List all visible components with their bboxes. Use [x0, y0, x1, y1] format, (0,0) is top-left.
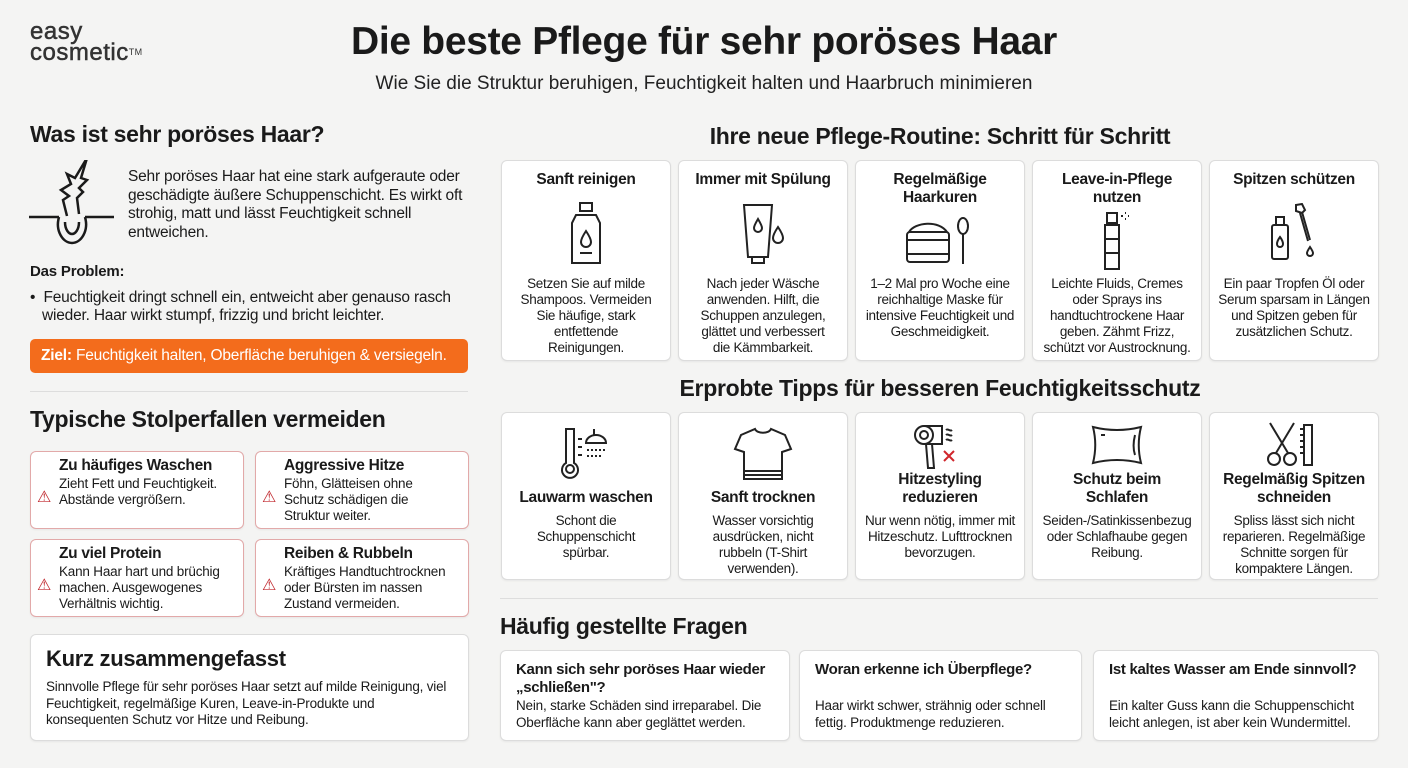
pitfall: waschen — [30, 451, 244, 529]
step 4: Leave-in-Pflege — [1062, 171, 1172, 188]
pitfall: waschen: ⚠ — [37, 489, 51, 506]
pitfall: protein: Zu viel Protein — [59, 545, 161, 562]
step 5: Spitzen schützen — [1233, 171, 1355, 188]
tip 4: Seiden-/Satinkissenbezug oder Schlafhaube gegen Reibung. — [1043, 513, 1191, 560]
step 4: nutzen — [1093, 189, 1141, 206]
pitfall: hitze: ⚠ — [262, 489, 276, 506]
heading: was ist: Was ist sehr poröses Haar? — [30, 121, 324, 147]
summary card — [30, 634, 469, 741]
faq 1: Nein, starke Schäden sind irreparabel. Die Oberfläche kann aber geglättet werden. — [516, 698, 761, 730]
pitfall: protein — [30, 539, 244, 617]
tip 1 — [501, 412, 671, 580]
text: problem: • Feuchtigkeit dringt schnell ein, entweicht aber genauso rasch wieder. Haar wirkt stumpf, frizzig und bricht leichter. — [30, 289, 451, 324]
text: problem — [30, 263, 451, 324]
step 3: Haarkuren — [903, 189, 977, 206]
tip 3: Nur wenn nötig, immer mit Hitzeschutz. Lufttrocknen bevorzugen. — [865, 513, 1015, 560]
step 3: 1–2 Mal pro Woche eine reichhaltige Maske für intensive Feuchtigkeit und Geschmeidigkeit. — [866, 276, 1014, 339]
tip 3: Hitzestyling — [898, 471, 982, 488]
step 1: Sanft reinigen — [536, 171, 636, 188]
tip 3: reduzieren — [902, 489, 978, 506]
pitfall: protein: ⚠ — [37, 577, 51, 594]
tip 2: Sanft trocknen — [711, 489, 815, 506]
subtitle: Wie Sie die Struktur beruhigen, Feuchtigkeit halten und Haarbruch minimieren — [376, 73, 1032, 94]
tip 4: Schutz beim — [1073, 471, 1161, 488]
summary card: Sinnvolle Pflege für sehr poröses Haar setzt auf milde Reinigung, viel Feuchtigkeit, regelmäßige Kuren, Leave-in-Produkte und konsequenten Schutz vor Hitze und Reibung. — [46, 679, 446, 727]
title: Die beste Pflege für sehr poröses Haar — [351, 20, 1057, 63]
tip 5: Regelmäßig Spitzen — [1223, 471, 1365, 488]
pitfall: hitze: Aggressive Hitze — [284, 457, 404, 474]
tip 5: Spliss lässt sich nicht reparieren. Regelmäßige Schnitte sorgen für kompaktere Längen. — [1223, 513, 1365, 576]
step 1 — [501, 160, 671, 361]
pitfall: protein: Kann Haar hart und brüchig machen. Ausgewogenes Verhältnis wichtig. — [59, 564, 220, 611]
step 3: Regelmäßige — [893, 171, 987, 188]
pitfall: waschen: Abstände vergrößern. — [59, 492, 186, 507]
pitfall: waschen: Zieht Fett und Feuchtigkeit. — [59, 476, 217, 491]
step 3 — [855, 160, 1025, 361]
tip 4 — [1032, 412, 1202, 580]
tip 1: Lauwarm waschen — [519, 489, 653, 506]
text: problem: Das Problem: — [30, 263, 124, 280]
step 5 — [1209, 160, 1379, 361]
faq 1: Kann sich sehr poröses Haar wieder „schließen"? — [516, 661, 765, 696]
text: definition: Sehr poröses Haar hat eine stark aufgeraute oder geschädigte äußere Schuppenschicht. Es wirkt oft strohig, matt und lässt Feuchtigkeit schnell entweichen. — [128, 168, 462, 240]
pitfall: hitze — [255, 451, 469, 529]
callout: ziel — [30, 339, 468, 373]
tip 2 — [678, 412, 848, 580]
faq 3: Ein kalter Guss kann die Schuppenschicht leicht anlegen, ist aber kein Wundermittel. — [1109, 698, 1354, 730]
tip 5 — [1209, 412, 1379, 580]
step 1: Setzen Sie auf milde Shampoos. Vermeiden Sie häufige, stark entfettende Reinigungen. — [521, 276, 651, 355]
step 2 — [678, 160, 848, 361]
step 5: Ein paar Tropfen Öl oder Serum sparsam in Längen und Spitzen geben für zusätzlichen Schutz. — [1218, 276, 1370, 339]
faq 2 — [799, 650, 1082, 741]
summary card: Kurz zusammengefasst — [46, 646, 286, 671]
pitfall: waschen: Zu häufiges Waschen — [59, 457, 212, 474]
logo: cosmeticTM — [30, 39, 143, 66]
pitfall: reiben — [255, 539, 469, 617]
faq 3 — [1093, 650, 1379, 741]
step 2: Immer mit Spülung — [695, 171, 831, 188]
logo: easy — [30, 18, 83, 45]
pitfall: reiben: ⚠ — [262, 577, 276, 594]
icon: damaged hair — [29, 160, 114, 244]
step 4: Leichte Fluids, Cremes oder Sprays ins handtuchtrockene Haar geben. Zähmt Frizz, schützt vor Austrocknung. — [1043, 276, 1191, 355]
heading: faq: Häufig gestellte Fragen — [500, 613, 747, 639]
tip 5: schneiden — [1257, 489, 1331, 506]
tip 4: Schlafen — [1086, 489, 1148, 506]
tip 1: Schont die Schuppenschicht spürbar. — [537, 513, 635, 560]
pitfall: hitze: Föhn, Glätteisen ohne Schutz schädigen die Struktur weiter. — [284, 476, 413, 523]
step 4 — [1032, 160, 1202, 361]
tip 3 — [855, 412, 1025, 580]
faq 1 — [500, 650, 790, 741]
faq 3: Ist kaltes Wasser am Ende sinnvoll? — [1109, 661, 1356, 678]
pitfall: reiben: Reiben & Rubbeln — [284, 545, 413, 562]
heading: stolperfallen: Typische Stolperfallen vermeiden — [30, 406, 386, 432]
step 2: Nach jeder Wäsche anwenden. Hilft, die Schuppen anzulegen, glättet und verbessert die Kämmbarkeit. — [701, 276, 825, 355]
faq 2: Haar wirkt schwer, strähnig oder schnell fettig. Produktmenge reduzieren. — [815, 698, 1046, 730]
pitfall: reiben: Kräftiges Handtuchtrocknen oder Bürsten im nassen Zustand vermeiden. — [284, 564, 445, 611]
heading: tipps: Erprobte Tipps für besseren Feuchtigkeitsschutz — [680, 375, 1200, 401]
faq 2: Woran erkenne ich Überpflege? — [815, 661, 1032, 678]
tip 2: Wasser vorsichtig ausdrücken, nicht rubbeln (T-Shirt verwenden). — [713, 513, 813, 576]
heading: routine: Ihre neue Pflege-Routine: Schritt für Schritt — [710, 123, 1170, 149]
logo — [30, 18, 143, 66]
callout: ziel: Ziel: Feuchtigkeit halten, Oberfläche beruhigen & versiegeln. — [41, 347, 447, 364]
